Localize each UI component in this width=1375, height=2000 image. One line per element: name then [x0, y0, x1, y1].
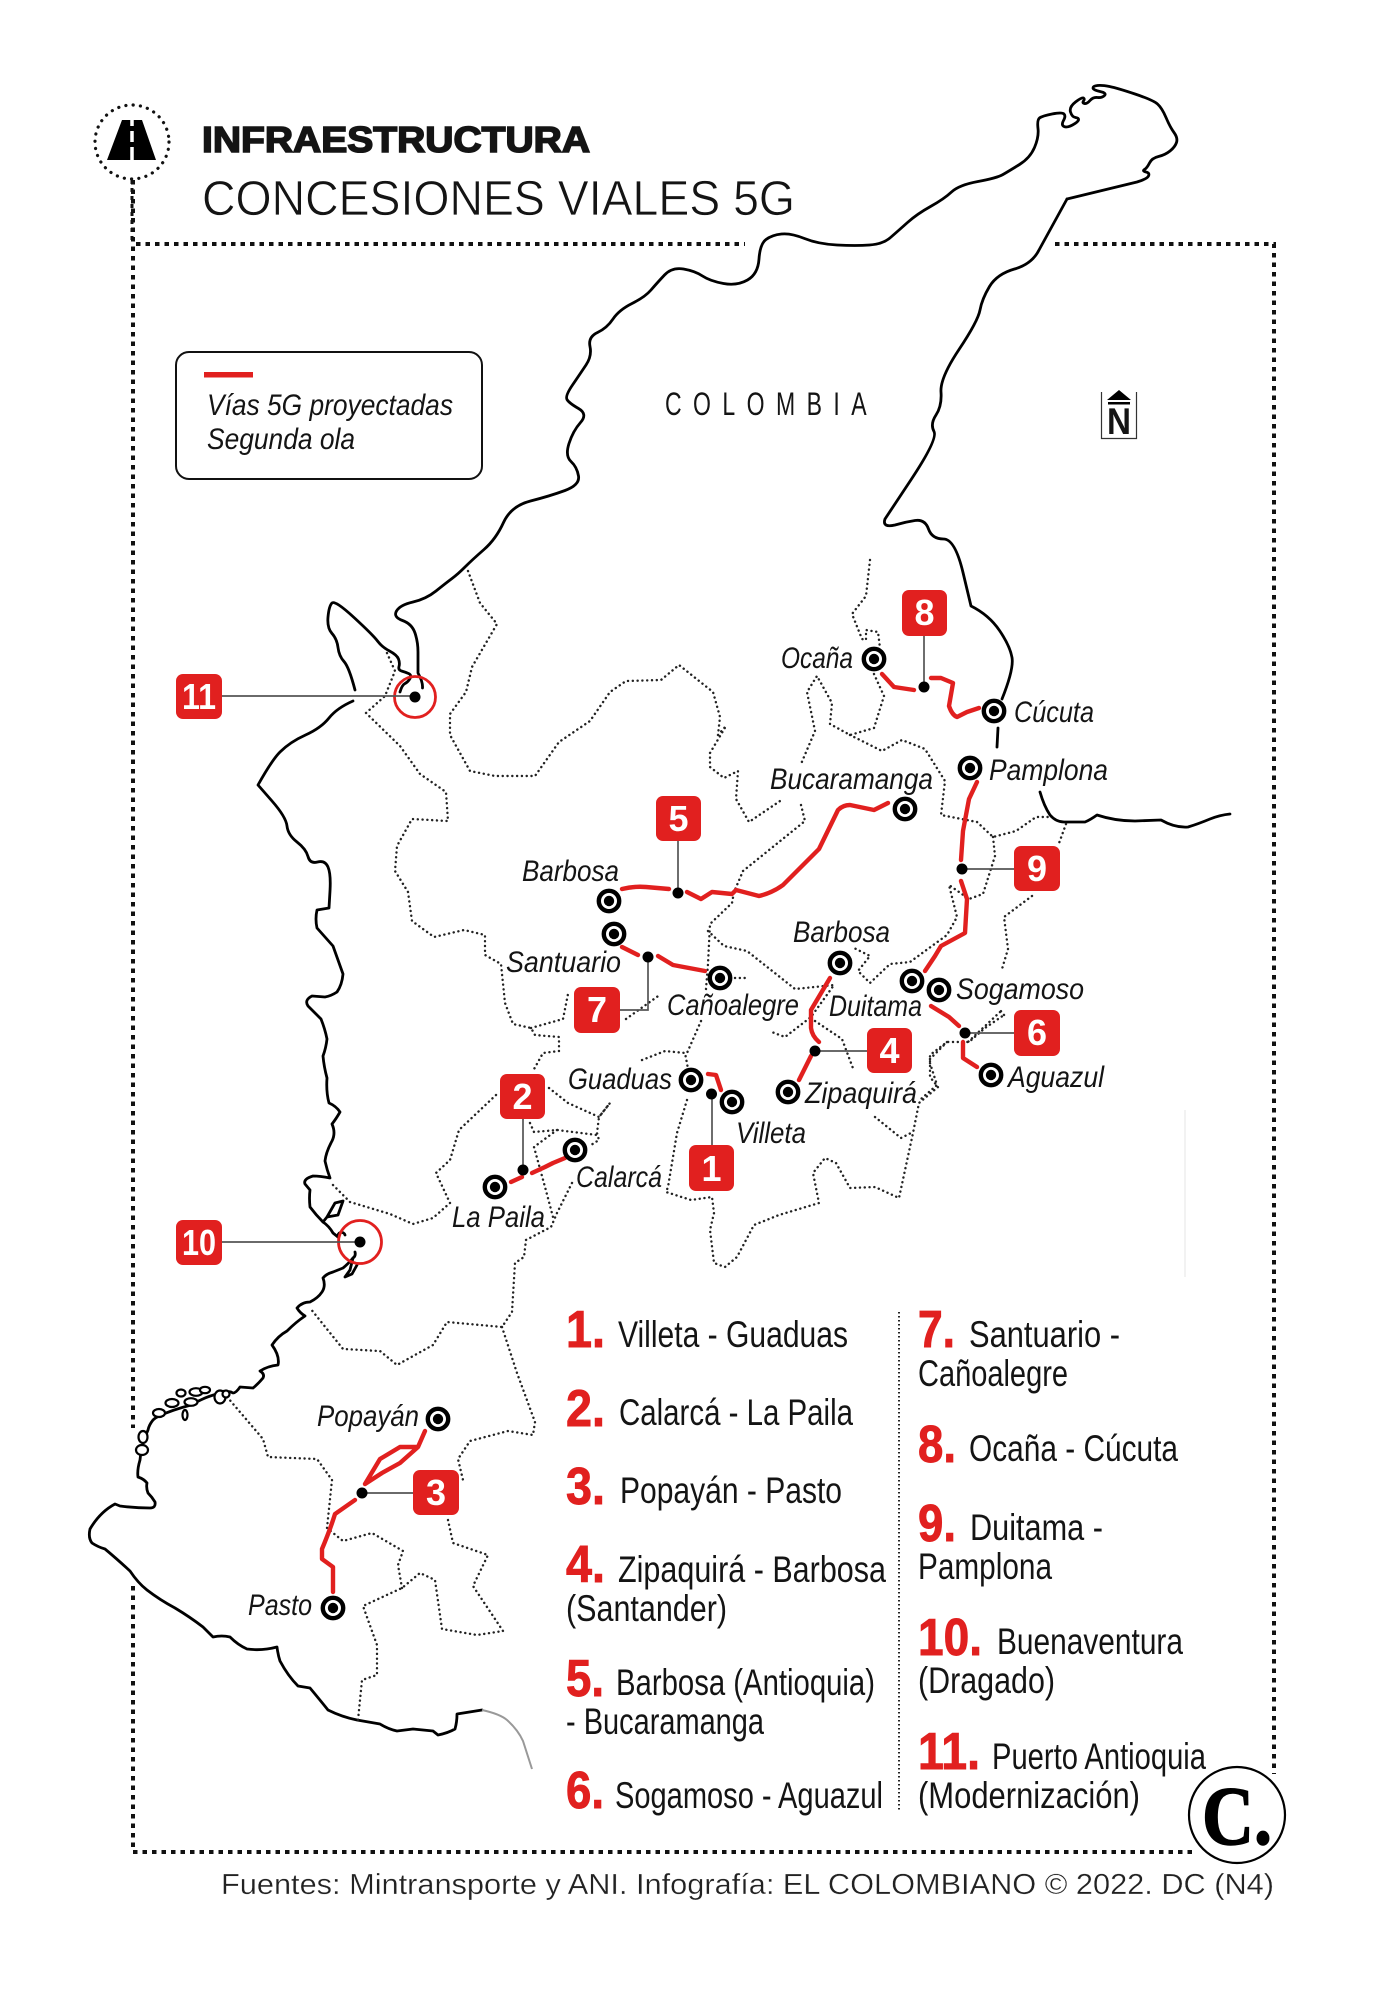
city labels: Pasto — [248, 1589, 312, 1622]
route 3 — [322, 1431, 425, 1592]
city labels: Popayán — [317, 1400, 419, 1433]
route 8 — [882, 674, 979, 717]
city labels: Barbosa — [522, 855, 619, 888]
city labels: Aguazul — [1006, 1061, 1105, 1094]
callout 2 — [500, 1074, 545, 1176]
item 7: Cañoalegre — [918, 1353, 1068, 1394]
item 4: (Santander) — [566, 1588, 727, 1629]
route 1 — [708, 1074, 721, 1090]
item 3: 3. — [566, 1458, 605, 1516]
city labels: Calarcá — [576, 1161, 662, 1194]
item 9: Duitama - — [970, 1507, 1103, 1548]
item 9: 9. — [918, 1495, 956, 1553]
coastline and borders — [89, 85, 1230, 1769]
legend — [176, 352, 482, 479]
callout 1: 1 — [701, 1148, 722, 1189]
city labels: Duitama — [829, 990, 922, 1023]
callout 3 — [356, 1470, 459, 1515]
project list — [566, 1301, 1206, 1820]
item 10 — [918, 1609, 1183, 1701]
item 6: Sogamoso - Aguazul — [615, 1775, 883, 1816]
item 3 — [566, 1458, 842, 1516]
item 2: Calarcá - La Paila — [619, 1392, 853, 1433]
callout 10 — [176, 1220, 366, 1265]
callout 9: 9 — [1027, 848, 1047, 889]
item 4: Zipaquirá - Barbosa — [618, 1549, 886, 1590]
callout 6: 6 — [1027, 1012, 1047, 1053]
city labels: Ocaña — [781, 642, 853, 675]
city labels: Cañoalegre — [667, 989, 799, 1022]
route 4 — [799, 978, 830, 1080]
icon: north arrow: N — [1107, 401, 1131, 442]
route 5 — [622, 803, 888, 899]
city labels: Santuario — [506, 946, 621, 979]
route 9 — [925, 782, 977, 971]
callout 9 — [956, 846, 1060, 891]
city labels: Guaduas — [568, 1063, 672, 1096]
dotted frame — [133, 180, 1274, 1852]
country label: COLOMBIA — [665, 386, 867, 422]
callout 8: 8 — [914, 592, 935, 633]
item 5 — [566, 1650, 875, 1742]
logo: C. — [1202, 1770, 1272, 1863]
city labels: Bucaramanga — [770, 763, 933, 796]
city labels: Cúcuta — [1014, 696, 1094, 729]
numbered callouts — [176, 590, 1060, 1515]
item 4 — [566, 1536, 886, 1629]
department boundaries — [228, 560, 1066, 1720]
callout 5 — [656, 796, 701, 898]
item 8: Ocaña - Cúcuta — [969, 1428, 1178, 1469]
callout 11: 11 — [182, 676, 216, 717]
callout 7: 7 — [587, 989, 607, 1030]
item 10: Buenaventura — [997, 1621, 1183, 1662]
column divider — [898, 1312, 900, 1810]
icon: north arrow — [1102, 390, 1136, 442]
item 7 — [918, 1301, 1120, 1394]
islands — [136, 1387, 230, 1455]
item 5: - Bucaramanga — [566, 1701, 764, 1742]
item 5: 5. — [566, 1650, 604, 1708]
item 11: 11. — [918, 1723, 980, 1781]
heading: CONCESIONES VIALES 5G — [202, 172, 795, 226]
callout 4 — [810, 1028, 912, 1073]
item 10: 10. — [918, 1609, 982, 1667]
heading: INFRAESTRUCTURA — [202, 119, 590, 160]
city labels: La Paila — [452, 1201, 545, 1234]
road routes — [322, 674, 979, 1592]
item 9: Pamplona — [918, 1546, 1052, 1587]
item 6 — [566, 1762, 883, 1820]
callout 7 — [574, 952, 654, 1033]
item 9 — [918, 1495, 1103, 1587]
legend: Segunda ola — [207, 423, 355, 456]
city markers — [323, 649, 1004, 1618]
item 8 — [918, 1416, 1178, 1474]
icon: road — [95, 105, 169, 244]
callout 5: 5 — [668, 798, 689, 839]
map of Colombia — [89, 85, 1230, 1769]
item 2: 2. — [566, 1380, 605, 1438]
callout 2: 2 — [512, 1076, 533, 1117]
item 5: Barbosa (Antioquia) — [616, 1662, 875, 1703]
callout 11 — [176, 674, 420, 719]
faint vertical line — [1184, 1110, 1186, 1277]
city labels: Barbosa — [793, 916, 890, 949]
city labels: Villeta — [736, 1117, 806, 1150]
route 7 — [622, 947, 705, 971]
route 2 — [511, 1158, 565, 1182]
item 1: Villeta - Guaduas — [618, 1314, 848, 1355]
city labels: Pamplona — [989, 754, 1108, 787]
source line: Fuentes: Mintransporte y ANI. Infografía: EL COLOMBIANO © 2022. DC (N4) — [221, 1869, 1274, 1901]
heading — [202, 119, 795, 226]
callout 3: 3 — [426, 1472, 446, 1513]
item 7: Santuario - — [969, 1314, 1120, 1355]
route 6 — [931, 1006, 977, 1067]
item 3: Popayán - Pasto — [620, 1470, 842, 1511]
item 11: (Modernización) — [918, 1775, 1140, 1816]
item 7: 7. — [918, 1301, 955, 1359]
callout 8 — [902, 590, 947, 692]
city labels — [248, 642, 1108, 1622]
item 4: 4. — [566, 1536, 605, 1594]
item 1 — [566, 1301, 848, 1359]
port circles — [338, 676, 436, 1264]
item 10: (Dragado) — [918, 1660, 1055, 1701]
legend: Vías 5G proyectadas — [207, 389, 453, 422]
item 6: 6. — [566, 1762, 604, 1820]
item 1: 1. — [566, 1301, 605, 1359]
city labels: Sogamoso — [956, 973, 1084, 1006]
item 11: Puerto Antioquia — [992, 1736, 1206, 1777]
callout 1 — [689, 1088, 734, 1191]
item 8: 8. — [918, 1416, 956, 1474]
callout 6 — [960, 1010, 1060, 1056]
callout 4: 4 — [879, 1030, 900, 1071]
item 2 — [566, 1380, 853, 1438]
city labels: Zipaquirá — [804, 1077, 917, 1110]
callout 10: 10 — [182, 1222, 216, 1263]
item 11 — [918, 1723, 1206, 1816]
